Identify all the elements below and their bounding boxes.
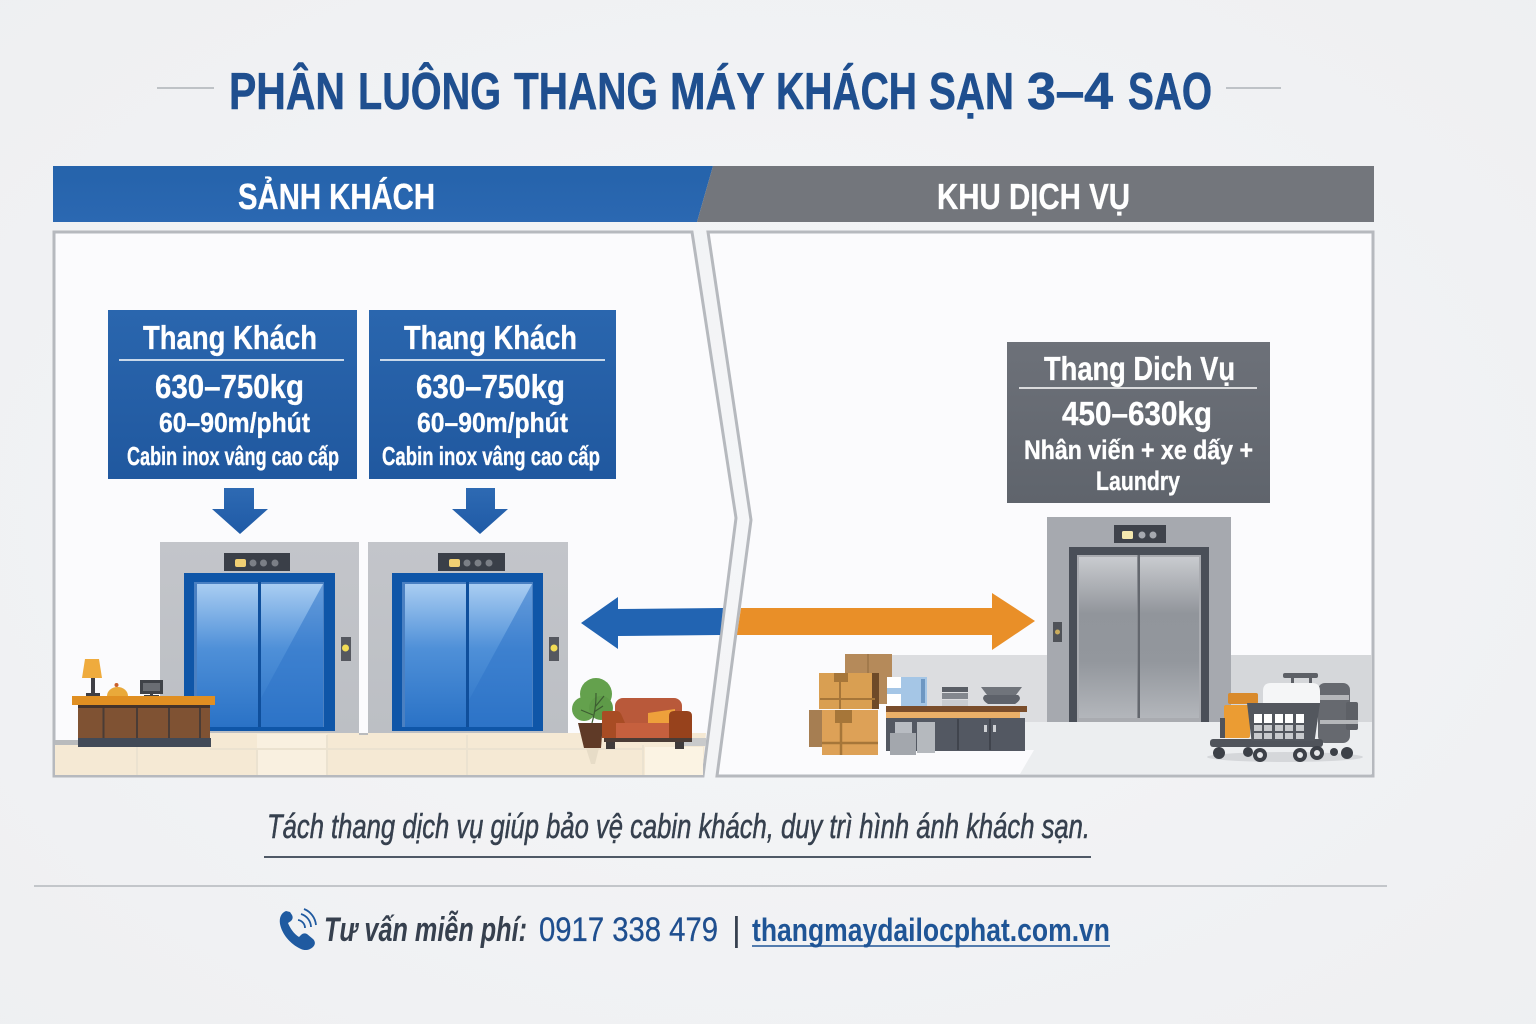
title: THANG — [514, 63, 658, 121]
panel: service area — [708, 232, 1373, 776]
header band: service area — [697, 166, 1374, 222]
spec box: guest elevator 2: Thang Khách — [404, 319, 577, 356]
spec box: guest elevator 2 — [369, 310, 616, 479]
reception desk — [72, 659, 215, 747]
icon: phone — [280, 909, 316, 950]
title: MÁY — [670, 63, 764, 121]
spec box: service elevator: Thang Dich Vụ — [1044, 350, 1235, 387]
spec box: guest elevator 2: Cabin inox vâng cao cấp — [382, 441, 600, 471]
service elevator — [1047, 517, 1231, 722]
spec box: service elevator — [1007, 342, 1270, 503]
spec box: guest elevator 1: Thang Khách — [143, 319, 317, 356]
title: KHÁCH — [776, 63, 917, 121]
service back wall and floor — [890, 655, 1372, 774]
spec box: service elevator: 450–630kg — [1062, 395, 1212, 432]
footer contact: Tư vấn miễn phí: — [324, 911, 527, 949]
sofa — [602, 698, 692, 749]
title: 3–4 — [1027, 63, 1113, 121]
header band: service area: KHU DỊCH VỤ — [937, 176, 1130, 217]
footer contact: | — [732, 911, 741, 949]
arrow: service flow right — [737, 593, 1035, 650]
plant — [572, 678, 613, 764]
spec box: service elevator: Nhân viến + xe dấy + — [1024, 435, 1253, 465]
spec box: guest elevator 1 — [108, 310, 357, 479]
spec box: guest elevator 1: 630–750kg — [155, 368, 304, 405]
title: SAO — [1128, 63, 1212, 121]
boxes and service counter — [809, 654, 1027, 755]
spec box: guest elevator 2: 60–90m/phút — [417, 407, 568, 438]
arrow: down to elevator 1 — [212, 488, 268, 534]
arrow: guest flow left — [581, 597, 723, 649]
footer contact: 0917 338 479 — [539, 911, 718, 949]
guest elevator 2 — [368, 542, 568, 733]
guest elevator 1 — [160, 542, 359, 733]
header band: guest lobby: SẢNH KHÁCH — [238, 176, 435, 217]
footer contact: thangmaydailocphat.com.vn — [752, 912, 1110, 948]
arrow: down to elevator 2 — [452, 488, 508, 534]
footer contact — [280, 909, 1110, 950]
title: SẠN — [929, 63, 1014, 121]
title — [157, 62, 1281, 121]
panel: guest lobby — [54, 232, 736, 776]
spec box: service elevator: Laundry — [1096, 466, 1180, 496]
header band: guest lobby — [53, 166, 713, 222]
spec box: guest elevator 2: 630–750kg — [416, 368, 565, 405]
spec box: guest elevator 1: Cabin inox vâng cao cấp — [127, 441, 339, 471]
floor: beige tiles — [55, 733, 706, 775]
title: PHÂN — [229, 62, 345, 121]
caption: Tách thang dịch vụ giúp bảo vệ cabin khách, duy trì hình ánh khách sạn. — [267, 808, 1090, 846]
spec box: guest elevator 1: 60–90m/phút — [159, 407, 310, 438]
title: LUÔNG — [358, 62, 501, 121]
luggage cart — [1207, 673, 1363, 762]
